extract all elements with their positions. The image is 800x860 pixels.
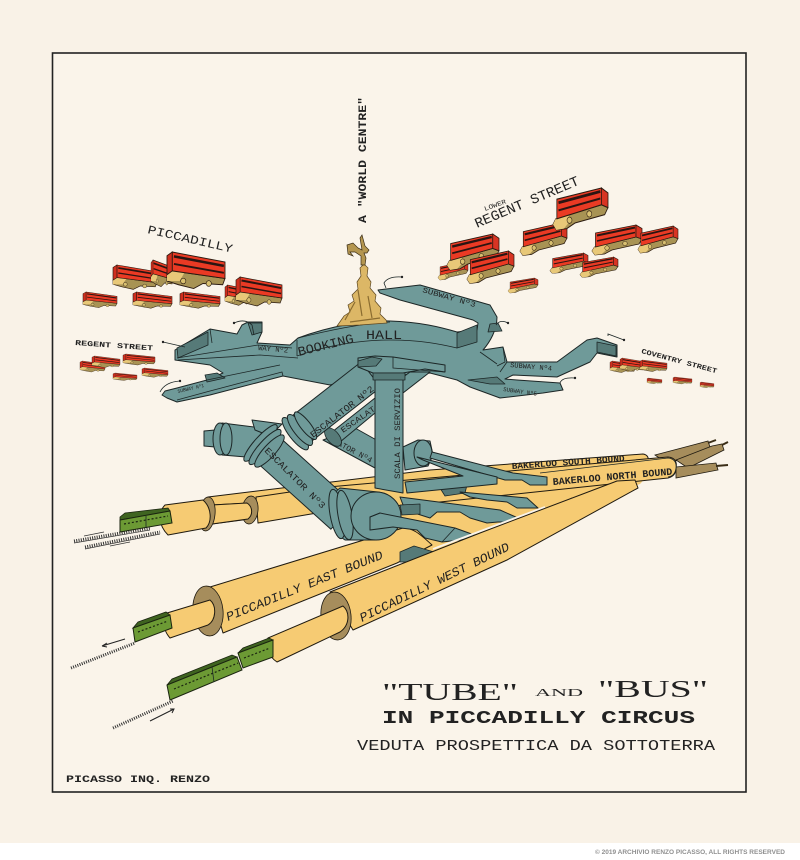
train 1 [120,508,172,532]
tube: north bound [256,457,676,523]
label: subway 2: WAY Nº2 [258,344,288,356]
lower escalator drum and platform block [326,488,480,562]
A World Centre label: A "WORLD CENTRE" [358,97,370,223]
track 2 [71,643,135,668]
arrow 2 [102,639,125,647]
label: Bakerloo north bound: BAKERLOO NORTH BOUND [552,468,673,489]
tube: front narrow section [160,500,210,535]
rear stub cylinder [403,440,433,470]
brown tunnel ends [655,440,728,478]
label: escalator 2: ESCALATOR Nº2 [309,384,376,440]
label: Piccadilly West Bound: PICCADILLY WEST BOUND [358,540,513,626]
Eros fountain [337,235,387,326]
buses: Lower Regent Street [438,188,678,293]
signature: PICASSO INQ. RENZO [66,775,210,786]
title line 1: "TUBE" [382,680,518,706]
label: subway 1: SUBWAY Nº1 [177,383,205,395]
label: escalator 3: ESCALATOR Nº3 [262,446,327,511]
label: Regent Street: REGENT STREET [75,340,154,353]
copyright notice: © 2019 ARCHIVIO RENZO PICASSO, ALL RIGHTS RESERVED [595,849,786,856]
Bakerloo tunnels [160,440,728,552]
hall band lines [177,322,507,400]
label: Booking Hall: HALL [366,328,402,343]
label: Bakerloo south bound: BAKERLOO SOUTH BOUND [512,454,626,472]
collars [241,495,259,525]
label: Coventry Street: COVENTRY STREET [640,348,718,376]
tube: north bound front overlay [540,458,676,490]
tube: back tunnel [208,454,648,510]
subway entrance arrows [160,276,625,392]
label: escalator 1: ESCALAT [340,405,378,435]
label: Scala di Servizio: SCALA DI SERVIZIO [393,388,403,479]
arrow 3 [150,709,174,721]
column: Scala di Servizio [358,356,445,493]
title block [357,677,715,755]
escalator 2 [278,359,383,453]
label: subway 5: SUBWAY Nº5 [503,386,538,398]
label: Booking Hall [296,328,402,360]
hall shell [162,285,617,402]
buses: Regent Street [80,354,168,381]
train 3 [167,638,273,700]
track 3 [113,701,173,728]
escalator 4 [323,428,380,470]
Piccadilly East tunnel [164,528,432,638]
cream gap between tunnels [433,507,545,549]
hall front face [457,325,477,348]
buses: Coventry Street [610,358,714,388]
tube: short narrow section [212,503,250,524]
train 2 [133,612,172,642]
label: subway 3: SUBWAY Nº3 [421,286,477,310]
Eros statue [347,235,369,265]
yellow underlay between tunnels [390,462,660,552]
platform passages: upper [400,440,578,523]
label: Regent Street large: REGENT STREET [473,174,582,233]
label: Lower: LOWER [483,198,507,213]
buses: Piccadilly [83,252,282,308]
frame: inner panel [52,53,746,792]
underground booking hall complex [162,285,617,402]
label: Piccadilly: PICCADILLY [146,223,234,256]
left horizontal escalator cylinder [204,420,282,458]
subway ends [177,332,208,358]
title line 1 [382,677,708,706]
title line 2: IN PICCADILLY CIRCUS [382,709,695,729]
trains and tracks [71,508,273,728]
track 1 [74,528,160,549]
escalator 1 [321,372,430,449]
escalator 3 [240,421,358,534]
label: Booking Hall: BOOKING [296,332,355,360]
label: Piccadilly East Bound: PICCADILLY EAST BOUND [224,549,386,625]
title line 1: "BUS" [598,677,708,703]
label: subway 4: SUBWAY Nº4 [510,362,552,374]
Piccadilly West tunnel [266,480,638,662]
label: escalator N4: ATOR Nº4 [336,440,374,466]
title line 1: AND [535,687,583,699]
title line 3: VEDUTA PROSPETTICA DA SOTTOTERRA [357,738,715,755]
